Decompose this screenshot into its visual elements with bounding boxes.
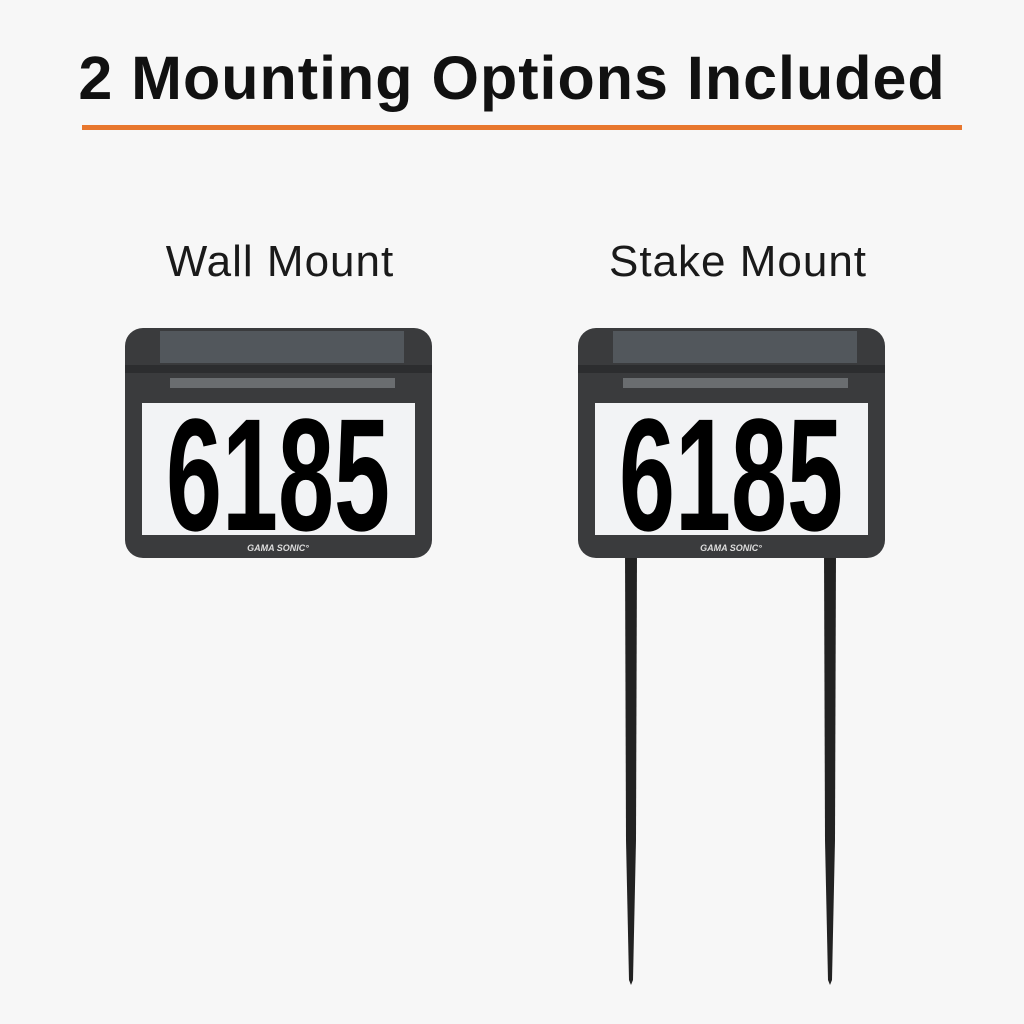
title: 2 Mounting Options Included <box>78 44 946 112</box>
label: wall mount: Wall Mount <box>166 237 394 286</box>
sign: stake mount: GAMA SONIC° <box>700 543 762 553</box>
sign: stake mount <box>578 328 885 558</box>
stakes <box>625 558 836 985</box>
label: stake mount: Stake Mount <box>609 237 867 286</box>
orange underline <box>82 125 962 130</box>
sign: wall mount: GAMA SONIC° <box>247 543 309 553</box>
sign: wall mount <box>125 328 432 558</box>
